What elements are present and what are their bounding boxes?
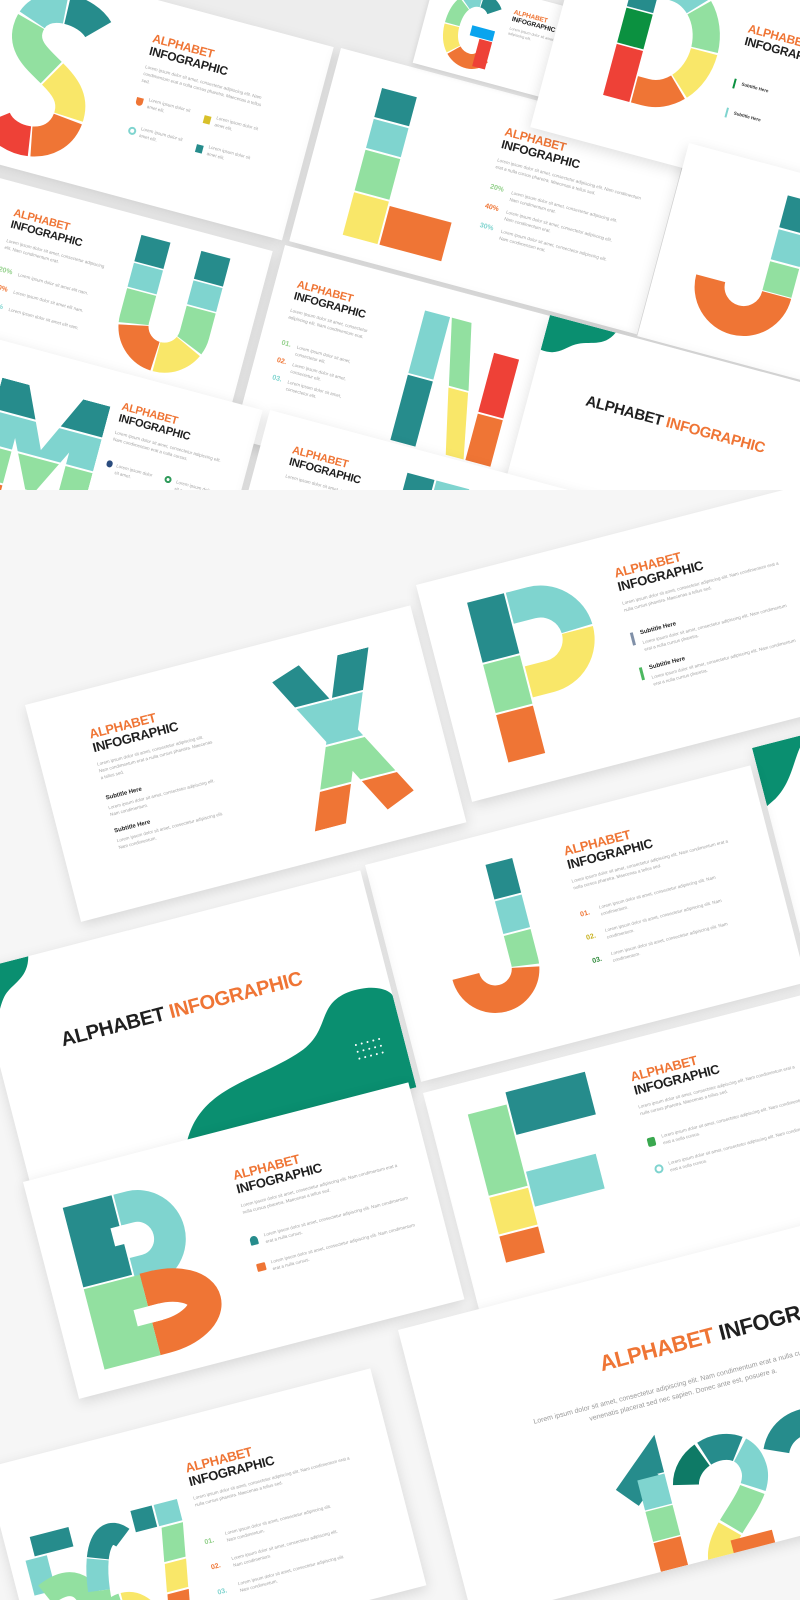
letter L [342,88,452,262]
subtitle blocks: Lorem ipsum dolor sit amet, consectetur adipiscing elit. Nam condimentum. [116,811,224,850]
percent list: Lorem ipsum dolor sit amet, consectetur adipiscing elit. Nam condimentum erat. [504,209,613,243]
icon items: Lorem ipsum dolor sit amet, consectetur adipiscing elit. Nam condimentum erat a nulla cursus. [263,1195,408,1244]
green blob [752,736,800,806]
slide: J letter (bottom) [365,765,800,1082]
heading: INFOGRAPHIC [288,456,362,486]
numbered list: 01. [204,1537,215,1546]
heading: ALPHABET [120,401,179,427]
bottom collage region [0,490,800,1600]
heading: INFOGRAPHIC [187,1452,276,1489]
heading: INFOGRAPHIC [500,137,582,171]
icon items [128,97,259,161]
letter J [452,858,540,1013]
paragraph: Lorem ipsum dolor sit amet, consectetur adipiscing elit. Nam condimentum erat a nulla cursus pharetra. Maecenas a tellus sed. [495,157,642,201]
slide: 567 numbers [0,1368,426,1600]
letter F [468,1072,605,1263]
heading: ALPHABET [562,827,632,859]
letter U [118,234,230,373]
icon items: Lorem ipsum dolor sit amet elit. [214,115,259,132]
heading: ALPHABET [184,1444,254,1476]
slide: P letter [416,485,800,802]
numbered list: Lorem ipsum dolor sit amet, consectetur adipiscing elit. Nam condimentum. [598,875,716,916]
green blob top-left [540,315,616,352]
percent list: 20% [489,183,505,194]
green wave bottom-right [188,988,416,1140]
slide: F letter [423,993,800,1310]
subtitle blocks: Lorem ipsum dolor sit amet, consectetur adipiscing elit. Nam condimentum. [108,778,215,817]
top collage region [0,0,800,490]
heading: ALPHABET [613,549,683,581]
icon items [249,1193,428,1293]
icon items [646,1097,800,1174]
numbered list [271,308,368,399]
title: ALPHABET INFOGRAPHIC [584,393,767,457]
numbered list: 02. [276,357,287,366]
paragraph and list: Lorem ipsum dolor sit amet elit nam. [8,307,79,331]
numbered list: Lorem ipsum dolor sit amet, consectetur adipiscing elit. Nam condimentum. [224,1504,332,1543]
heading: INFOGRAPHIC [293,290,367,321]
paragraph and list: Lorem ipsum dolor sit amet elit nam. [17,272,89,296]
numbered list: 01. [580,909,591,919]
paragraph and list: Lorem ipsum dolor sit amet elit nam. [13,290,84,313]
percent list: 40% [484,203,499,213]
percent list [479,183,618,262]
paragraph: Lorem ipsum dolor sit amet, consectetur adipiscing elit. Nam condimentum erat a nulla cursus pharetra. Maecenas a tellus sed. [240,1163,398,1215]
icon items: Lorem ipsum dolor sit amet, consectetur adipiscing elit. Nam condimentum erat a nulla cursus. [270,1222,415,1271]
icon items: Lorem ipsum dolor sit amet elit. [146,97,191,114]
numbered list: 03. [271,374,283,384]
paragraph: Lorem ipsum dolor sit amet, consectetur adipiscing elit. Nam condimentum erat a nulla cursus. [113,430,221,463]
numbered list: 01. [281,340,292,349]
letter X [272,647,414,832]
letter M [0,378,110,490]
paragraph: Lorem ipsum dolor sit amet, consectetur adipiscing elit. Nam condimentum erat a nulla cursus pharetra. Maecenas a tellus sed. [193,1456,350,1508]
slide: S letter [0,0,334,240]
heading: INFOGRAPHIC [565,835,654,872]
paragraph: Lorem ipsum dolor sit amet, consectetur adipiscing elit. Nam condimentum erat a nulla cursus pharetra. Maecenas a tellus sed. [571,838,728,890]
letter P [467,586,595,762]
subtitles: Subtitle Here [741,82,769,94]
letter J [694,195,800,336]
letter S [0,0,112,156]
numbered list: Lorem ipsum dolor sit amet, consectetur elit. [285,379,342,399]
numbered list [201,1485,388,1600]
slide: G letter (small) [413,0,600,107]
heading: ALPHABET [88,710,157,742]
heading: INFOGRAPHIC [91,718,180,755]
heading: ALPHABET [629,1053,699,1084]
heading: ALPHABET [291,444,349,471]
slide: D letter [530,0,800,220]
subtitle blocks: Lorem ipsum dolor sit amet, consectetur adipiscing elit. Nam condimentum erat a nulla cursus pharetra. [651,638,796,687]
heading: ALPHABET [12,207,71,234]
green blob top-left [0,956,28,1009]
numbered list: 03. [592,956,603,965]
heading: ALPHABET [513,8,548,24]
paragraph and list: Lorem ipsum dolor sit amet, consectetur adipiscing elit. Nam condimentum erat. [4,238,105,269]
icon items: Lorem ipsum dolor sit amet elit. [206,144,251,161]
subtitles: Subtitle Here [733,110,761,123]
heading: INFOGRAPHIC [235,1160,323,1196]
paragraph: Lorem ipsum dolor sit amet, consectetur adipiscing elit. Nam condimentum erat a nulla cursus pharetra. Maecenas a tellus sed. [638,1064,795,1116]
slide: 123 numbers [398,1200,800,1600]
slide: U letter [0,158,273,444]
slide: L letter [289,48,689,334]
numbered list [580,875,728,965]
heading: ALPHABET [296,279,354,305]
letter G [442,0,502,70]
numbers 5 6 7 [16,1498,221,1600]
heading: INFOGRAPHIC [616,557,705,594]
numbered list: Lorem ipsum dolor sit amet, consectetur elit. [290,362,347,382]
numbered list: Lorem ipsum dolor sit amet, consectetur adipiscing elit. Nam condimentum erat. [288,308,368,339]
slide: J letter (top) [637,143,800,429]
slide: M letter [0,348,263,490]
subtitle blocks [105,778,224,850]
numbered list: 02. [586,933,597,942]
heading: ALPHABET [503,125,568,154]
paragraph: Lorem ipsum dolor sit amet, consectetur adipiscing elit. Nam condimentum erat a nulla cursus pharetra. Maecenas a tellus sed. [141,64,262,107]
numbered list: Lorem ipsum dolor sit amet, consectetur adipiscing elit. Nam condimentum. [610,921,728,963]
subtitle blocks: Subtitle Here [105,787,143,802]
subtitle blocks: Subtitle Here [640,621,677,636]
icon items [106,460,213,490]
slide: X letter [25,605,466,922]
paragraph: Lorem ipsum dolor sit amet, consectetur adipiscing elit. [508,26,575,48]
title: ALPHABET INFOGRAPHIC [59,968,305,1051]
green blob bottom-right [691,492,800,601]
numbered list: Lorem ipsum dolor sit amet, consectetur adipiscing elit. Nam condimentum. [231,1529,338,1568]
paragraph: Lorem ipsum dolor sit amet, consectetur adipiscing elit. Nam condimentum erat a nulla cursus pharetra. Maecenas a tellus sed. [97,734,213,780]
icon items: Lorem ipsum dolor sit amet elit. [139,126,183,142]
paragraph and list [0,238,105,331]
subtitle blocks [630,603,796,687]
heading: INFOGRAPHIC [632,1061,721,1097]
letter B [63,1176,227,1371]
letter fragment [402,472,470,490]
slide: N letter [233,245,633,531]
numbered list: Lorem ipsum dolor sit amet, consectetur adipiscing elit. Nam condimentum. [604,898,722,940]
icon items: Lorem ipsum dolor sit amet. [114,463,153,479]
subtitle blocks: Subtitle Here [649,656,686,671]
numbers 1 2 3 [398,1200,800,1600]
subtitle blocks: Subtitle Here [114,819,151,835]
slide: B letter [23,1082,464,1399]
slide: title with green wave (bottom) [0,870,416,1187]
heading: ALPHABET [231,1151,301,1183]
numbered list: Lorem ipsum dolor sit amet, consectetur adipiscing elit. Nam condimentum. [237,1554,345,1593]
subtitle blocks: Lorem ipsum dolor sit amet, consectetur adipiscing elit. Nam condimentum erat a nulla cursus pharetra. [642,603,787,652]
heading: INFOGRAPHIC [117,412,192,443]
heading: INFOGRAPHIC [148,43,229,78]
numbered list: Lorem ipsum dolor sit amet, consectetur elit. [295,345,351,364]
percent list: Lorem ipsum dolor sit amet, consectetur adipiscing elit. Nam condimentum erat. [499,229,608,262]
numbered list: 03. [217,1587,228,1597]
slide: small bottom slide [218,410,618,696]
heading: INFOGRAPHIC [511,15,556,33]
numbered list: 02. [210,1562,222,1571]
heading: ALPHABET [151,31,216,61]
subtitles [724,78,769,123]
percent list: 30% [479,222,494,232]
letter D [603,0,720,108]
slide: title with green waves (top) [498,315,800,601]
heading: INFOGRAPHIC [9,218,84,249]
slide: title right edge [752,648,800,965]
paragraph: Lorem ipsum dolor sit amet, consectetur adipiscing elit. Nam condimentum erat a nulla cursus pharetra. Maecenas a tellus sed. [622,561,779,613]
percent list: Lorem ipsum dolor sit amet, consectetur adipiscing elit. Nam condimentum erat. [509,190,618,223]
letter N [390,310,519,467]
